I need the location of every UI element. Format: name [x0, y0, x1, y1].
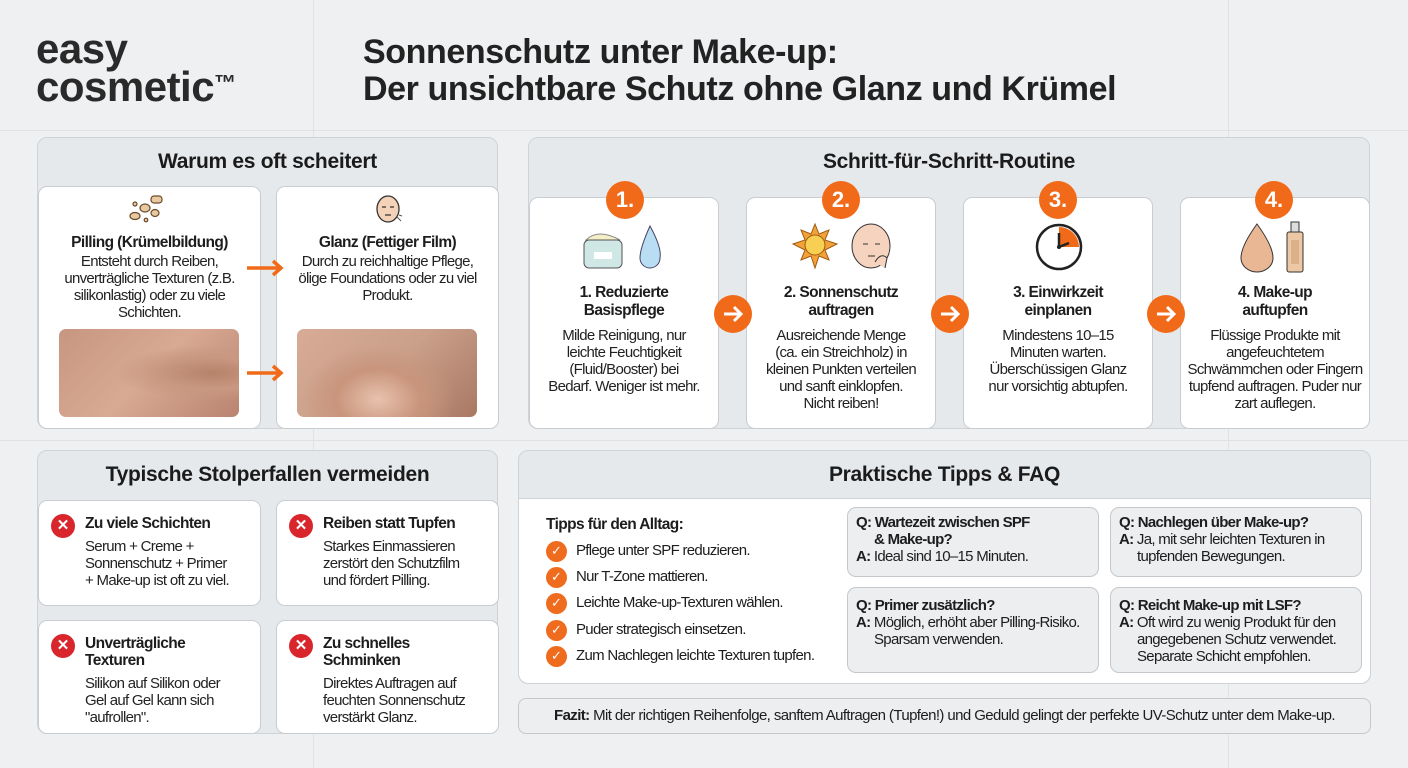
panel: Stolperfallen: [37, 450, 498, 734]
text: step 2 title: auftragen: [808, 302, 874, 319]
card: Unverträgliche Texturen: [38, 620, 261, 734]
fazit callout: [518, 698, 1371, 734]
tips list: Zum Nachlegen leichte Texturen tupfen.: [576, 647, 814, 664]
title: [363, 33, 1116, 108]
text: step 4 title: auftupfen: [1242, 302, 1308, 319]
faq: Nachlegen: A: Ja, mit sehr leichten Texturen in: [1119, 531, 1324, 548]
card: step 1: [529, 197, 719, 429]
card: Unverträgliche Texturen: ✕: [57, 637, 69, 654]
card: Zu viele Schichten: + Make-up ist oft zu viel.: [85, 572, 229, 589]
text: step 4 title: [1238, 284, 1312, 319]
icon: face: [376, 195, 402, 223]
tips list: ✓: [551, 596, 562, 611]
tips list: [546, 516, 814, 667]
icon: crumbs: [129, 195, 163, 222]
badge: 1: [606, 181, 644, 219]
card: Unverträgliche Texturen: Unverträgliche: [85, 635, 185, 652]
faq: Primer: [847, 587, 1099, 673]
card: Zu schnelles Schminken: Direktes Auftragen auf: [323, 675, 456, 692]
arrow: 3 to 4: [1147, 295, 1185, 333]
logo: cosmetic™: [36, 63, 236, 110]
card: Zu viele Schichten: Serum + Creme +: [85, 538, 194, 555]
panel: Schritt-für-Schritt-Routine: [528, 137, 1370, 429]
card: Zu viele Schichten: ✕: [57, 517, 69, 534]
faq: Wartezeit: A: Ideal sind 10–15 Minuten.: [856, 548, 1028, 565]
image: shiny nose: [297, 329, 477, 417]
faq: LSF: angegebenen Schutz verwendet.: [1137, 631, 1336, 648]
icon: sun & face: [792, 222, 890, 270]
faq: LSF: Q: Reicht Make-up mit LSF?: [1119, 597, 1301, 614]
faq: LSF: [1110, 587, 1362, 673]
tips list: ✓: [551, 623, 562, 638]
card: Reiben statt Tupfen: Starkes Einmassieren: [323, 538, 455, 555]
faq: Wartezeit: & Make-up?: [874, 531, 952, 548]
card: Zu viele Schichten: Sonnenschutz + Primer: [85, 555, 227, 572]
tips list: ✓: [551, 544, 562, 559]
text: step 1 title: [580, 284, 668, 319]
badge: 4: 4.: [1265, 187, 1283, 212]
badge: 4: [1255, 181, 1293, 219]
card: Reiben statt Tupfen: [276, 500, 499, 606]
panel: Warum es oft scheitert: [37, 137, 498, 429]
faq: LSF: A: Oft wird zu wenig Produkt für den: [1119, 614, 1336, 631]
arrow: 1 to 2: [714, 295, 752, 333]
fazit callout: Fazit: Mit der richtigen Reihenfolge, sanftem Auftragen (Tupfen!) und Geduld gelingt der perfekte UV-Schutz unter dem Make-up.: [554, 707, 1335, 724]
badge: 3: 3.: [1049, 187, 1067, 212]
text: step 1 title: Basispflege: [584, 302, 664, 319]
arrow: top: [247, 260, 284, 276]
text: step 3 title: 3. Einwirkzeit: [1013, 284, 1103, 301]
card: Zu viele Schichten: [38, 500, 261, 606]
tips list: Nur T-Zone mattieren.: [576, 568, 708, 585]
text: step 4 desc: Flüssige Produkte mit angefeuchtetem Schwämmchen oder Fingern tupfend auftragen. Puder nur zart auflegen.: [1188, 327, 1362, 412]
logo: easy: [36, 25, 127, 72]
card: Zu viele Schichten: Zu viele Schichten: [85, 515, 210, 532]
image: pilling skin: [59, 329, 239, 417]
card: Unverträgliche Texturen: "aufrollen".: [85, 709, 149, 726]
card: step 3: [963, 197, 1153, 429]
text: step 2 title: 2. Sonnenschutz: [784, 284, 898, 301]
faq: Wartezeit: Q: Wartezeit zwischen SPF: [856, 514, 1030, 531]
text: Pilling desc: Entsteht durch Reiben, unverträgliche Texturen (z.B. silikonlastig) oder zu viele Schichten.: [64, 253, 235, 321]
text: step 1 desc: Milde Reinigung, nur leichte Feuchtigkeit (Fluid/Booster) bei Bedarf. Weniger ist mehr.: [548, 327, 700, 395]
text: step 2 desc: Ausreichende Menge (ca. ein Streichholz) in kleinen Punkten verteilen und sanft einklopfen. Nicht reiben!: [766, 327, 916, 412]
panel: Tipps & FAQ: [518, 450, 1371, 684]
icon: cream & drop: [584, 225, 661, 268]
card: Zu schnelles Schminken: ✕: [295, 637, 307, 654]
badge: 2: 2.: [832, 187, 850, 212]
icon: sponge & foundation: [1240, 222, 1304, 272]
faq: Nachlegen: Q: Nachlegen über Make-up?: [1119, 514, 1308, 531]
arrow: 2 to 3: [931, 295, 969, 333]
arrow: bottom: [247, 364, 284, 382]
faq: Wartezeit: [847, 507, 1099, 577]
card: Pilling: [38, 186, 261, 429]
title: Der unsichtbare Schutz ohne Glanz und Krümel: [363, 70, 1116, 108]
text: step 3 title: einplanen: [1025, 302, 1091, 319]
text: step 4 title: 4. Make-up: [1238, 284, 1312, 301]
card: Zu schnelles Schminken: feuchten Sonnenschutz: [323, 692, 465, 709]
badge: 2: [822, 181, 860, 219]
card: Glanz: [276, 186, 499, 429]
faq: Primer: A: Möglich, erhöht aber Pilling-Risiko.: [856, 614, 1080, 631]
card: Unverträgliche Texturen: Texturen: [85, 652, 145, 669]
tips list: Leichte Make-up-Texturen wählen.: [576, 594, 783, 611]
faq: Primer: Sparsam verwenden.: [874, 631, 1003, 648]
card: Unverträgliche Texturen: Silikon auf Silikon oder: [85, 675, 220, 692]
card: Zu schnelles Schminken: verstärkt Glanz.: [323, 709, 417, 726]
heading: Praktische Tipps & FAQ: [829, 463, 1060, 486]
faq: Nachlegen: tupfenden Bewegungen.: [1137, 548, 1285, 565]
heading: Warum es oft scheitert: [158, 150, 377, 173]
card: Zu schnelles Schminken: Zu schnelles: [323, 635, 410, 652]
tips list: Tipps für den Alltag:: [546, 516, 683, 533]
logo: [36, 25, 236, 110]
icon: clock: [1036, 224, 1082, 270]
tips list: ✓: [551, 570, 562, 585]
card: Zu schnelles Schminken: Schminken: [323, 652, 400, 669]
heading: Schritt-für-Schritt-Routine: [823, 150, 1075, 173]
card: Unverträgliche Texturen: Gel auf Gel kann sich: [85, 692, 214, 709]
card: Zu schnelles Schminken: [276, 620, 499, 734]
faq: LSF: Separate Schicht empfohlen.: [1137, 648, 1311, 665]
card: Reiben statt Tupfen: Reiben statt Tupfen: [323, 515, 455, 532]
text: step 1 title: 1. Reduzierte: [580, 284, 668, 301]
text: step 2 title: [784, 284, 898, 319]
card: step 2: [746, 197, 936, 429]
card: Reiben statt Tupfen: zerstört den Schutzfilm: [323, 555, 459, 572]
card: step 4: [1180, 197, 1370, 429]
text: step 3 desc: Mindestens 10–15 Minuten warten. Überschüssigen Glanz nur vorsichtig abtupfen.: [988, 327, 1128, 395]
text: Pilling title: Pilling (Krümelbildung): [71, 234, 228, 251]
card: Reiben statt Tupfen: und fördert Pilling.: [323, 572, 430, 589]
heading: Typische Stolperfallen vermeiden: [106, 463, 429, 486]
faq: Nachlegen: [1110, 507, 1362, 577]
text: Glanz desc: Durch zu reichhaltige Pflege, ölige Foundations oder zu viel Produkt.: [298, 253, 477, 304]
tips list: ✓: [551, 649, 562, 664]
text: step 3 title: [1013, 284, 1104, 319]
badge: 1: 1.: [616, 187, 634, 212]
faq: Primer: Q: Primer zusätzlich?: [856, 597, 995, 614]
card: Reiben statt Tupfen: ✕: [295, 517, 307, 534]
tips list: Pflege unter SPF reduzieren.: [576, 542, 750, 559]
badge: 3: [1039, 181, 1077, 219]
text: Glanz title: Glanz (Fettiger Film): [319, 234, 456, 251]
tips list: Puder strategisch einsetzen.: [576, 621, 746, 638]
title: Sonnenschutz unter Make-up:: [363, 33, 838, 71]
